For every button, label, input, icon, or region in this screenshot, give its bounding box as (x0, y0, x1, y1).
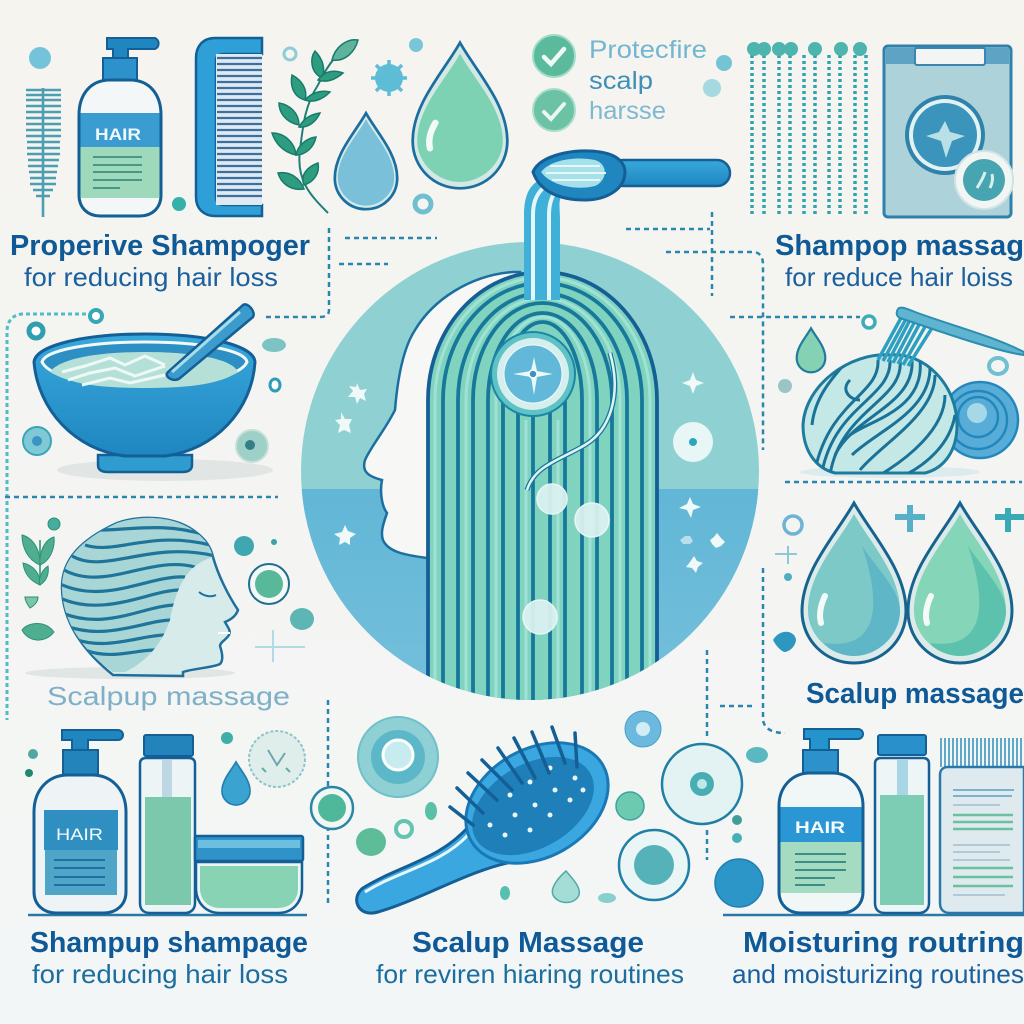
heading: bottom center: for reviren hiaring routines (376, 959, 684, 989)
panel: bottom left products (25, 730, 353, 915)
icon: right drop blue green (802, 503, 906, 663)
jar (195, 836, 303, 913)
heading: bottom left: Shampup shampage (30, 927, 308, 959)
panel: protective scalp checklist: harsse (589, 97, 666, 125)
decorative motif: virus-like snowflake (284, 38, 431, 212)
heading: top left: Properive Shampoger (10, 230, 310, 262)
product card (884, 46, 1013, 217)
panel: bottom right products (723, 729, 1024, 915)
head profile (364, 272, 520, 558)
checklist text: Protecfire (589, 36, 707, 64)
panel: protective scalp checklist (533, 35, 732, 131)
showerhead (533, 151, 730, 200)
icon: hair bundle with comb (800, 308, 1024, 478)
heading: bottom right: Moisturing routring (743, 927, 1024, 959)
icon: hair brush (357, 718, 630, 913)
check icon two (533, 89, 575, 131)
shampoo bottle (79, 38, 161, 216)
bottle (779, 729, 863, 913)
heading: bottom left (30, 927, 308, 989)
panel: protective scalp checklist: scalp (589, 67, 653, 95)
icon: sleeping head profile (25, 518, 238, 679)
tube (875, 735, 929, 913)
heading: top right (775, 230, 1024, 292)
clock-like disc (249, 731, 305, 787)
bottle: HAIR (56, 825, 103, 844)
panel: top left products (26, 38, 262, 217)
heading: bottom right: and moisturizing routines (732, 959, 1024, 989)
icon: leaf branch (272, 40, 358, 213)
dotted strands (747, 42, 867, 217)
heading: bottom center (376, 927, 684, 989)
shampoo bottle: HAIR (95, 125, 141, 144)
heading: top right: for reduce hair loiss (785, 262, 1013, 292)
heading: top left: for reducing hair loss (24, 262, 278, 292)
bowl accents (23, 310, 286, 462)
panel: top right hair strands and card (747, 42, 1013, 217)
target rings (625, 711, 661, 747)
sparkles (334, 372, 725, 573)
info box (940, 738, 1024, 913)
icon: small water drop (335, 113, 397, 209)
small accents (29, 47, 51, 69)
icon: mixing bowl (34, 304, 273, 481)
icon: right drop green (908, 503, 1012, 663)
dashed connector lines (5, 212, 1022, 903)
drop (222, 762, 250, 805)
comb (196, 38, 262, 216)
hair wisp (527, 353, 615, 490)
heading: bottom center: Scalup Massage (412, 927, 644, 959)
icon: large water drop (413, 43, 507, 188)
central circle (300, 242, 760, 720)
bubbles (523, 484, 609, 634)
heading: bottom right (732, 927, 1024, 989)
heading: bottom left: for reducing hair loss (32, 959, 288, 989)
text: scalpup massage label: Scalpup massage (47, 681, 290, 711)
fern stripes (26, 88, 61, 217)
bottle: HAIR (795, 818, 845, 837)
check icon one (533, 35, 575, 77)
gear disc (358, 717, 438, 797)
heading: top left (10, 230, 310, 292)
hair stripes (427, 272, 658, 720)
heading: top right: Shampop massag (775, 230, 1024, 262)
tube (140, 735, 195, 913)
panel: center bottom bubbles (356, 711, 768, 907)
plant and accents by head (22, 518, 314, 662)
icon: right small drop (797, 328, 825, 372)
scalp medallion (491, 332, 575, 416)
bottle (34, 730, 126, 913)
target disc (673, 422, 713, 462)
right side accents (773, 316, 1024, 652)
water stream (524, 178, 562, 300)
